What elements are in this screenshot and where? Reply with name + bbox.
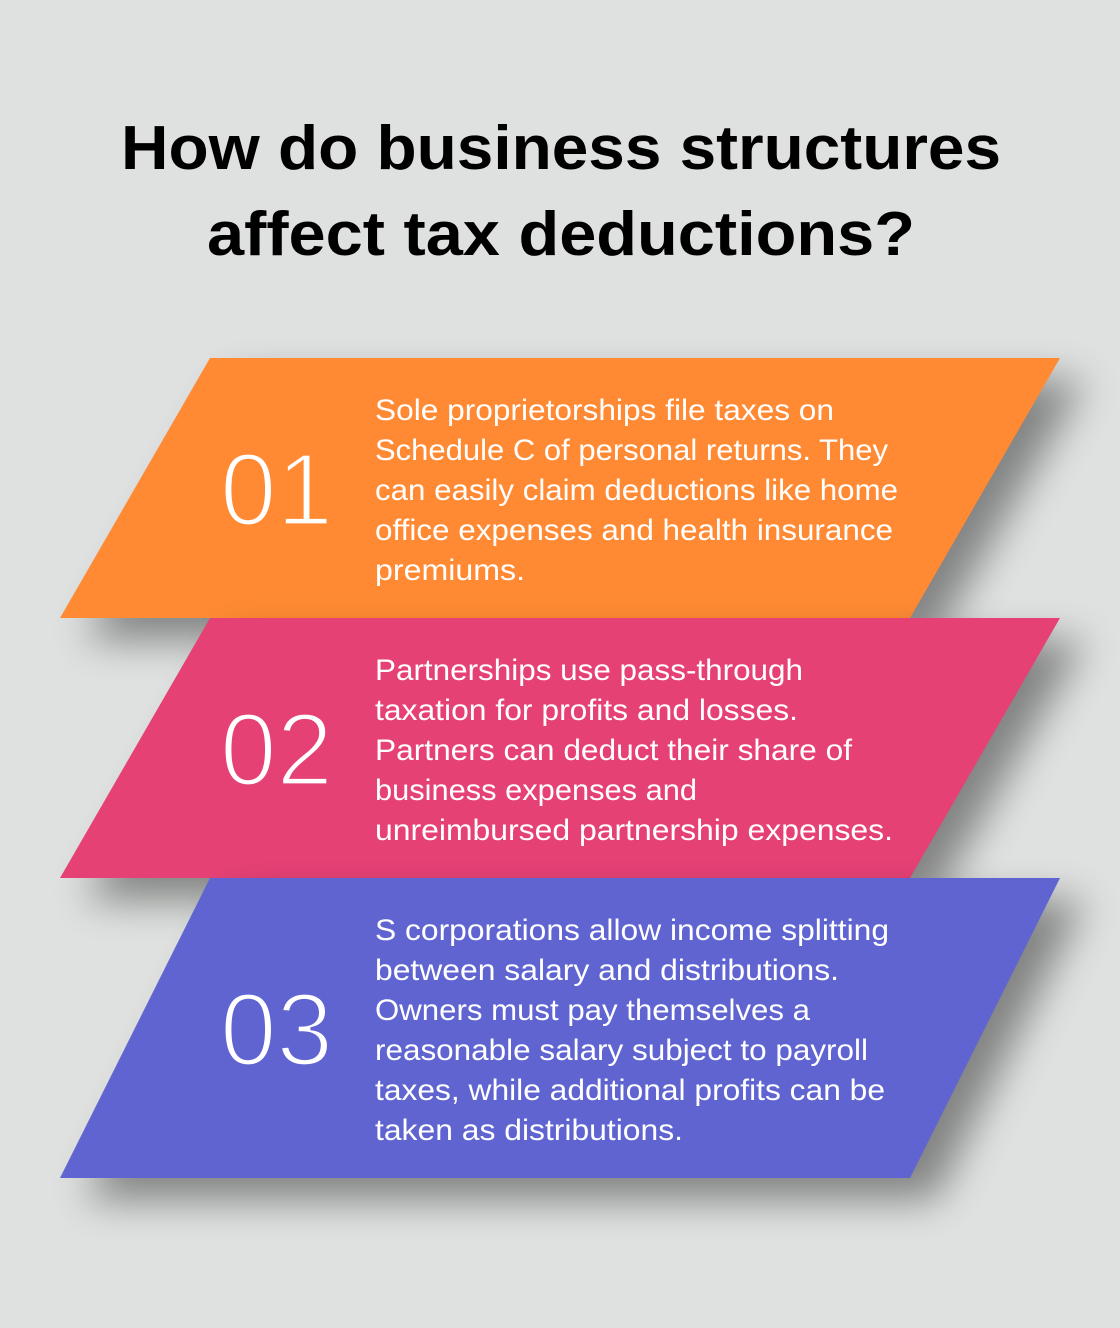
text: step 02 description [375, 654, 893, 847]
text: step 02 description: taxation for profits and losses. [375, 694, 798, 727]
title [121, 114, 1001, 269]
text: step 03 description: Owners must pay themselves a [375, 994, 810, 1027]
panel: step 03 S corporations [60, 878, 1060, 1178]
number 03: 03 [220, 972, 333, 1087]
text: step 02 description: Partnerships use pass-through [375, 654, 803, 687]
number 01: 01 [220, 432, 333, 547]
title: affect tax deductions? [207, 200, 915, 269]
text: step 01 description: can easily claim deductions like home [375, 474, 898, 507]
title: How do business structures [121, 114, 1001, 183]
text: step 02 description: unreimbursed partnership expenses. [375, 814, 893, 847]
text: step 03 description [375, 914, 889, 1147]
text: step 03 description: reasonable salary subject to payroll [375, 1034, 868, 1067]
panel: step 02 partnerships [60, 618, 1060, 878]
text: step 03 description: taxes, while additional profits can be [375, 1074, 885, 1107]
text: step 01 description: Sole proprietorships file taxes on [375, 394, 834, 427]
text: step 01 description: office expenses and health insurance [375, 514, 893, 547]
panel: step 01 sole proprietorships [60, 358, 1060, 618]
number 02: 02 [220, 692, 333, 807]
text: step 03 description: S corporations allow income splitting [375, 914, 889, 947]
text: step 03 description: between salary and distributions. [375, 954, 839, 987]
text: step 01 description: Schedule C of personal returns. They [375, 434, 888, 467]
text: step 02 description: business expenses and [375, 774, 697, 807]
text: step 03 description: taken as distributions. [375, 1114, 683, 1147]
text: step 01 description: premiums. [375, 554, 525, 587]
text: step 02 description: Partners can deduct their share of [375, 734, 853, 767]
text: step 01 description [375, 394, 898, 587]
